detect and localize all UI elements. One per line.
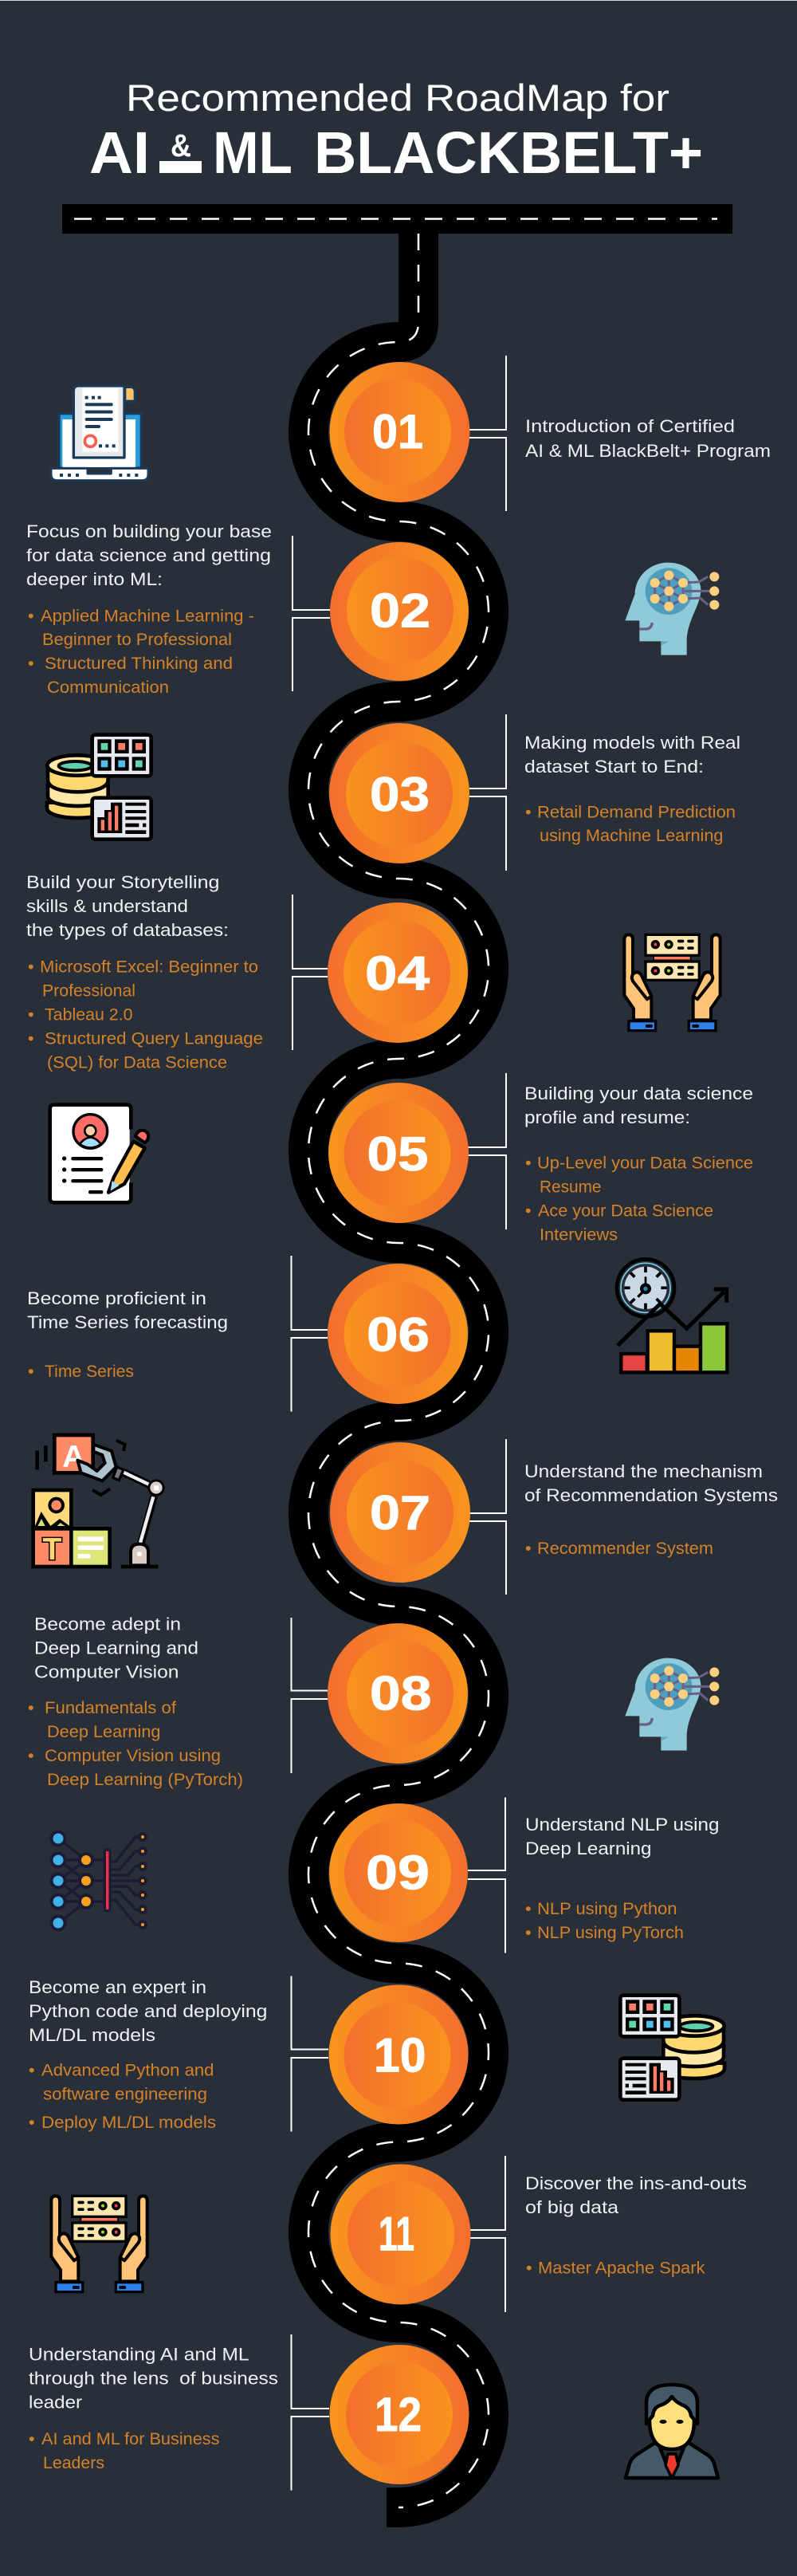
icon: business leader	[626, 2385, 718, 2478]
number badge: 04	[365, 947, 430, 1000]
step 12	[29, 2334, 718, 2491]
step 04	[26, 872, 720, 1072]
icon: neural network chip	[49, 1831, 147, 1931]
number badge: 08	[370, 1666, 432, 1721]
number badge	[330, 2164, 470, 2304]
text block	[525, 2173, 747, 2277]
icon: robot arm with blocks: T	[42, 1532, 61, 1567]
winding road	[308, 234, 489, 2507]
text block: of big data	[525, 2197, 619, 2217]
connector	[292, 536, 330, 691]
icon: database with reports	[47, 735, 151, 840]
text block: Understand the mechanism	[524, 1461, 763, 1481]
text block: Deploy ML/DL models	[41, 2113, 216, 2132]
connector	[292, 895, 328, 1050]
text block: Become adept in	[34, 1614, 181, 1634]
step 01	[51, 356, 771, 511]
text block: dataset Start to End:	[524, 757, 704, 777]
step 10	[29, 1976, 724, 2132]
step 05	[50, 1073, 753, 1244]
number badge: 03	[370, 768, 430, 821]
icon: hands holding servers	[624, 934, 720, 1031]
text block: •	[525, 1923, 532, 1942]
text block: Microsoft Excel: Beginner to	[40, 957, 258, 976]
connector	[470, 2156, 505, 2312]
text block: Beginner to Professional	[42, 630, 232, 649]
title line one: Recommended RoadMap for	[126, 77, 669, 119]
number badge: 10	[374, 2028, 426, 2082]
connector	[469, 714, 506, 871]
text block: •	[28, 1746, 34, 1765]
text block: •	[526, 2258, 532, 2277]
text block: Making models with Real	[524, 733, 740, 753]
text block	[28, 1614, 243, 1789]
text block: Deep Learning and	[34, 1638, 198, 1658]
step 06	[27, 1256, 727, 1411]
text block: Structured Query Language	[45, 1028, 263, 1048]
icon: database with reports, mirrored	[620, 1996, 724, 2100]
text block: profile and resume:	[524, 1107, 690, 1127]
text block: (SQL) for Data Science	[47, 1052, 227, 1072]
text block: Discover the ins-and-outs	[525, 2173, 747, 2193]
icon: clock with rising chart	[617, 1259, 727, 1372]
step 11	[51, 2156, 747, 2312]
number badge	[328, 1083, 469, 1223]
icon: resume and pencil	[50, 1105, 148, 1202]
text block: •	[525, 1153, 532, 1172]
text block: Tableau 2.0	[45, 1005, 133, 1024]
text block: •	[28, 957, 34, 976]
connector	[292, 1256, 328, 1411]
text block: of Recommendation Systems	[524, 1485, 778, 1505]
step 08	[28, 1614, 719, 1789]
text block: •	[28, 1698, 34, 1717]
text block: Recommender System	[537, 1539, 713, 1558]
icon: AI head	[625, 1658, 719, 1751]
number badge	[330, 542, 469, 681]
text block: Applied Machine Learning -	[41, 606, 254, 625]
step 02	[26, 521, 719, 697]
step 07	[33, 1435, 778, 1595]
text block: Professional	[42, 981, 135, 1000]
text block: for data science and getting	[26, 545, 271, 565]
icon: laptop with document	[51, 386, 148, 481]
text block	[525, 416, 771, 461]
text block: NLP using Python	[537, 1899, 677, 1918]
text block: Retail Demand Prediction	[537, 802, 736, 821]
text block: AI and ML for Business	[41, 2429, 220, 2448]
title line two	[89, 120, 703, 186]
text block: AI & ML BlackBelt+ Program	[525, 441, 771, 461]
text block: the types of databases:	[26, 920, 229, 940]
text block: deeper into ML:	[26, 569, 163, 589]
number badge: 02	[370, 584, 430, 638]
text block: •	[29, 2429, 35, 2448]
text block: Become an expert in	[29, 1977, 206, 1997]
icon: AI head	[625, 563, 719, 655]
icon: robot arm with blocks: A	[62, 1439, 85, 1474]
number badge	[330, 362, 470, 502]
text block: •	[28, 1005, 34, 1024]
number badge: 06	[367, 1308, 430, 1362]
text block: Focus on building your base	[26, 521, 272, 541]
text block: skills & understand	[26, 896, 188, 916]
text block: Fundamentals of	[45, 1698, 176, 1717]
text block	[524, 733, 740, 845]
text block	[26, 872, 263, 1072]
text block: Deep Learning (PyTorch)	[47, 1770, 243, 1789]
text block: Advanced Python and	[41, 2060, 214, 2079]
step 09	[49, 1797, 719, 1953]
text block: •	[28, 606, 34, 625]
road centre dashes	[308, 234, 489, 2507]
number badge	[329, 723, 469, 863]
road top bar dashes	[74, 218, 717, 220]
text block	[524, 1083, 753, 1244]
text block: •	[29, 2113, 35, 2132]
number badge	[330, 1442, 470, 1583]
text block: Leaders	[43, 2453, 104, 2472]
number badge: 09	[366, 1846, 430, 1899]
text block: Understand NLP using	[525, 1815, 719, 1835]
number badge: 07	[370, 1486, 430, 1540]
text block	[525, 1815, 719, 1942]
text block: NLP using PyTorch	[537, 1923, 684, 1942]
text block: •	[28, 1028, 34, 1048]
text block: Time Series	[45, 1362, 134, 1381]
step 03	[47, 714, 740, 871]
text block: Ace your Data Science	[538, 1201, 713, 1220]
text block	[29, 1977, 268, 2132]
text block: Time Series forecasting	[27, 1312, 228, 1332]
text block: •	[28, 1362, 34, 1381]
text block: Become proficient in	[27, 1288, 206, 1308]
text block: •	[28, 654, 34, 673]
connector	[292, 1976, 328, 2132]
road top bar	[62, 204, 732, 234]
number badge	[330, 2345, 469, 2484]
number badge: 11	[379, 2207, 414, 2261]
number badge	[328, 1985, 469, 2124]
text block	[29, 2344, 278, 2472]
text block: Building your data science	[524, 1083, 753, 1103]
icon: robot arm with blocks	[33, 1435, 165, 1568]
connector	[469, 356, 506, 511]
title	[89, 77, 703, 186]
road	[62, 204, 732, 2507]
text block: Master Apache Spark	[538, 2258, 705, 2277]
text block: Computer Vision using	[45, 1746, 221, 1765]
icon: hands holding servers, mirrored	[51, 2196, 147, 2292]
title line two: BLACKBELT+	[314, 120, 703, 186]
connector	[468, 1073, 506, 1229]
text block: Resume	[540, 1177, 601, 1196]
connector	[468, 1797, 505, 1953]
text block: using Machine Learning	[540, 826, 724, 845]
text block: Interviews	[540, 1225, 618, 1244]
title line two: AI	[89, 120, 150, 186]
text block: Understanding AI and ML	[29, 2344, 249, 2365]
number badge	[329, 1803, 468, 1942]
text block: software engineering	[43, 2084, 207, 2103]
number badge	[328, 1623, 468, 1764]
title line two: ML	[213, 120, 292, 186]
text block: •	[525, 1899, 532, 1918]
connector	[292, 2334, 329, 2491]
text block: •	[525, 1539, 532, 1558]
text block: ML/DL models	[29, 2025, 155, 2045]
text block: •	[29, 2060, 35, 2079]
text block: •	[525, 802, 532, 821]
text block: Computer Vision	[34, 1662, 179, 1682]
text block	[26, 521, 272, 697]
text block: Build your Storytelling	[26, 872, 220, 892]
text block: Structured Thinking and	[45, 654, 233, 673]
text block: Python code and deploying	[29, 2001, 268, 2021]
number badge: 05	[367, 1127, 429, 1181]
connector	[469, 1439, 506, 1595]
text block: Communication	[47, 678, 169, 697]
text block: Introduction of Certified	[525, 416, 735, 436]
text block: leader	[29, 2392, 82, 2413]
title line two: &	[171, 128, 191, 163]
text block: Up-Level your Data Science	[537, 1153, 753, 1172]
connector	[292, 1618, 328, 1773]
text block	[524, 1461, 778, 1558]
number badge: 01	[372, 405, 423, 458]
number badge: 12	[375, 2388, 422, 2441]
text block	[27, 1288, 228, 1381]
text block: •	[525, 1201, 532, 1220]
number badge	[328, 903, 468, 1043]
text block: Deep Learning	[525, 1839, 652, 1858]
text block: Deep Learning	[47, 1722, 161, 1741]
number badge	[328, 1264, 468, 1404]
text block: through the lens of business	[29, 2368, 278, 2389]
